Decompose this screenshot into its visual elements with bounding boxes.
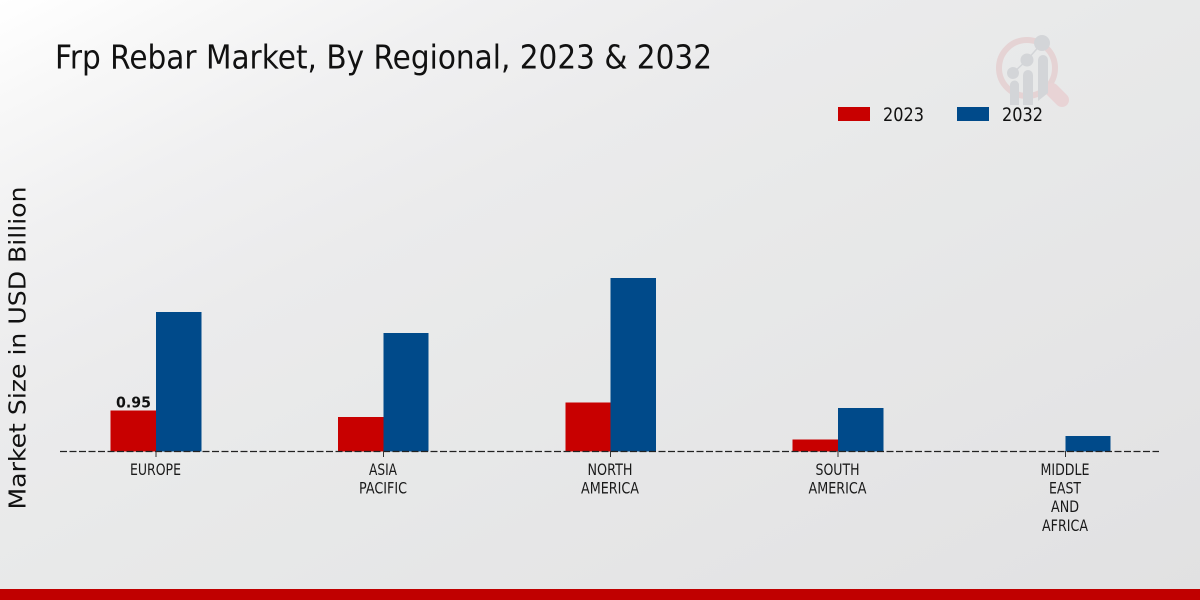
legend item: 2023: 2023 — [883, 105, 924, 126]
category label: Middle East and Africa: AND — [1051, 497, 1079, 516]
category label: Middle East and Africa — [1040, 460, 1090, 535]
bars: Middle East and Africa — [1066, 436, 1110, 452]
category label: North America — [581, 460, 639, 498]
y axis label: Market Size in USD Billion — [4, 187, 32, 510]
category label: Asia Pacific — [359, 460, 407, 498]
legend item: 2032 — [957, 105, 1043, 126]
legend — [838, 105, 1043, 126]
bars: Asia Pacific — [338, 333, 428, 452]
title: Frp Rebar Market, By Regional, 2023 & 2032 — [55, 38, 712, 76]
category label: Europe: EUROPE — [130, 460, 181, 479]
watermark logo — [999, 35, 1062, 105]
category label: Asia Pacific: ASIA — [369, 460, 397, 479]
bars: North America — [566, 278, 656, 452]
bars: Europe — [110, 312, 202, 452]
category label: Middle East and Africa: MIDDLE — [1040, 460, 1090, 479]
category label: North America: AMERICA — [581, 478, 639, 498]
legend item: 2032: 2032 — [1002, 105, 1043, 126]
bars: South America — [792, 408, 884, 452]
bottom bar — [0, 589, 1200, 600]
category label: Middle East and Africa: AFRICA — [1042, 516, 1088, 535]
category label: North America: NORTH — [588, 460, 632, 479]
category label: Middle East and Africa: EAST — [1049, 478, 1081, 498]
category label: South America: SOUTH — [816, 460, 860, 479]
bar chart — [60, 278, 1159, 457]
value label: 0.95 — [116, 394, 151, 412]
legend item: 2023 — [838, 105, 924, 126]
category label: South America: AMERICA — [808, 478, 867, 498]
category label: South America — [808, 460, 867, 498]
category label: Asia Pacific: PACIFIC — [359, 478, 407, 498]
